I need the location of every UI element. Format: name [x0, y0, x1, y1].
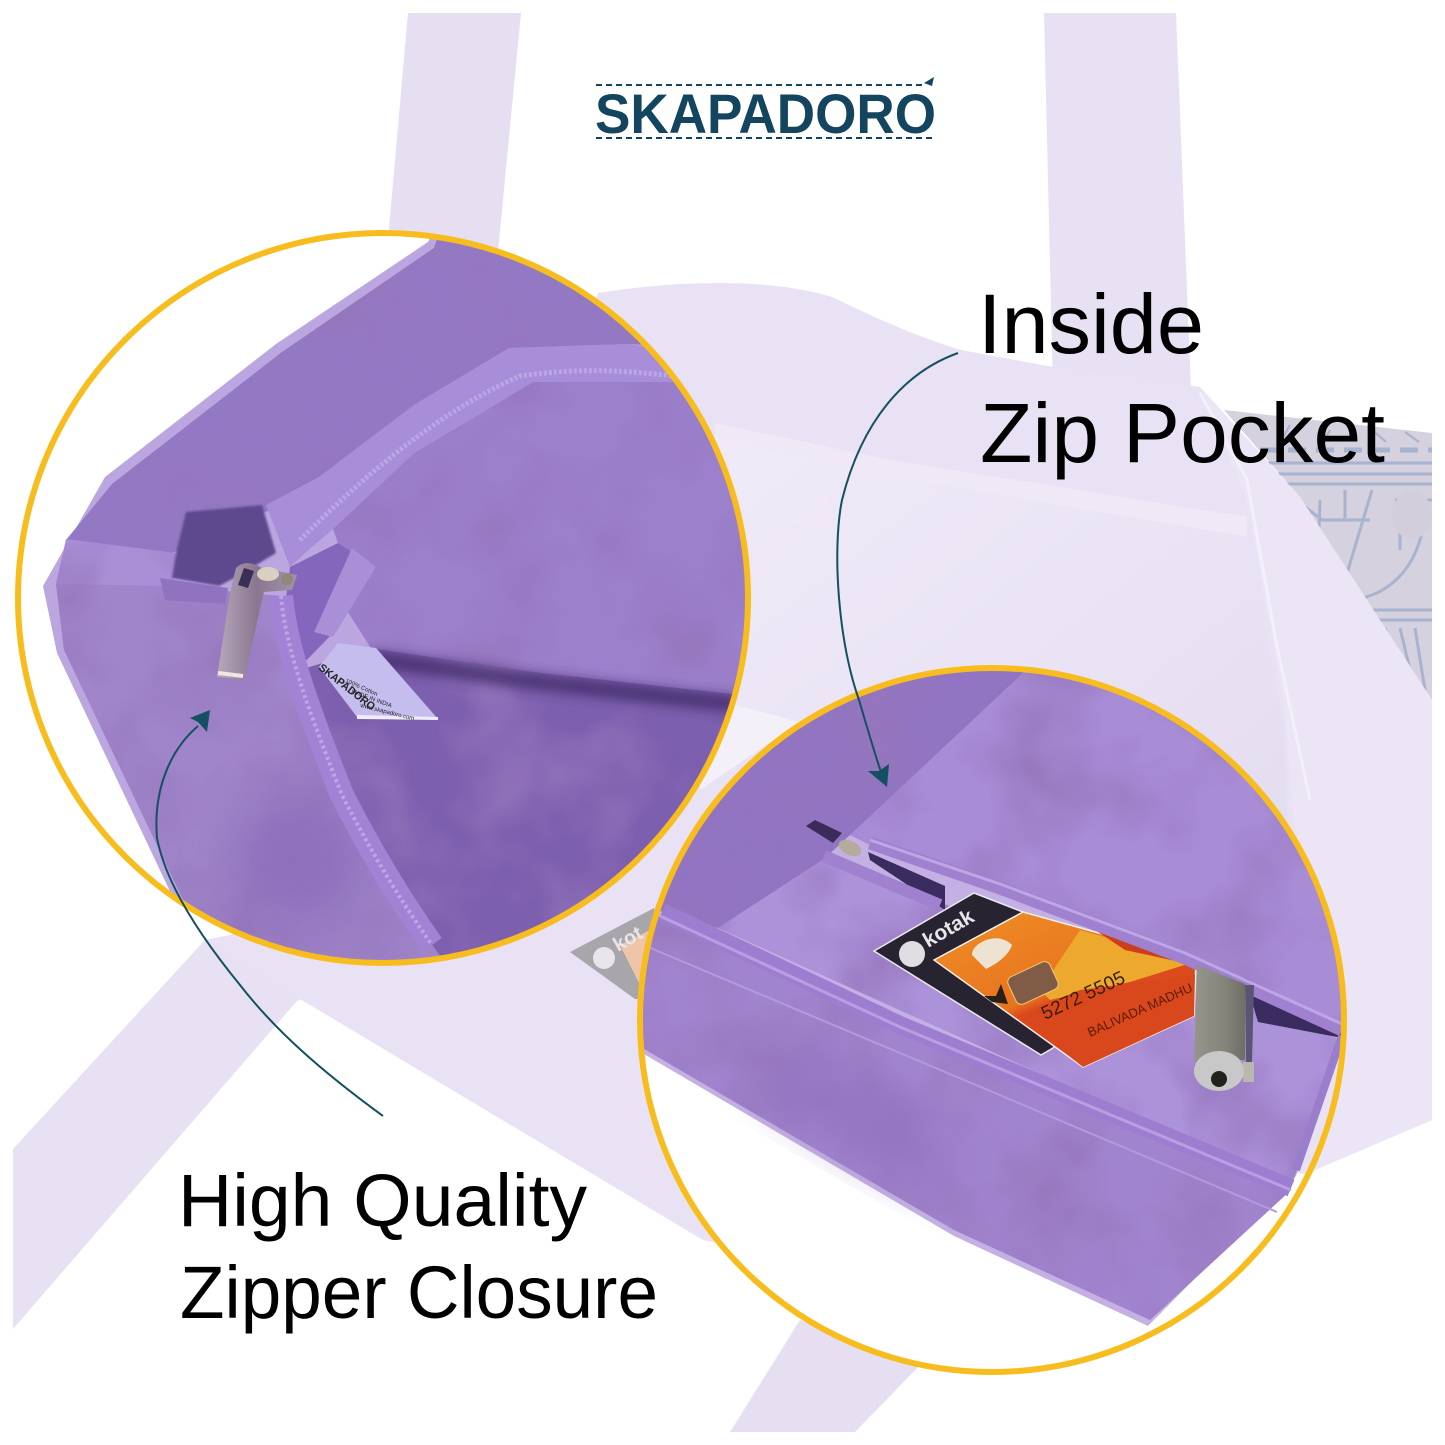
lower panel shading: [764, 1074, 936, 1205]
pale floor strip between the lenses: [700, 705, 800, 790]
care label: www.skapadoro.com: [359, 703, 415, 722]
orange card: BALIVADA MADHU: [1085, 980, 1195, 1040]
zipper pull: [217, 563, 297, 680]
strap: bottom left: [13, 940, 312, 1329]
lavender rim: [43, 239, 732, 956]
top zipper teeth: [300, 371, 690, 540]
care label: SKAPADORO: [316, 662, 377, 713]
orange card: 5272 5505: [1038, 968, 1129, 1025]
lens: inside zip pocket: [620, 640, 1360, 1372]
lower zipper highlight: [660, 916, 1291, 1190]
heading: high quality zipper closure: Zipper Closure: [180, 1251, 658, 1334]
bank logo: [972, 938, 1012, 969]
strap: top left: [386, 13, 521, 262]
pale side of the bag at right: [1297, 1058, 1339, 1174]
orange card: [934, 912, 1196, 1067]
lens ring: [18, 233, 748, 963]
side fold strip: [56, 539, 176, 590]
zip pocket left tape: [824, 856, 940, 905]
black card: [874, 893, 1060, 1055]
flap stitching: [1200, 393, 1310, 800]
bag interior: [700, 440, 1290, 900]
strap: top right: [1044, 13, 1191, 390]
middle panel under zipper: [718, 859, 1342, 1187]
pocket opening right: [1245, 978, 1342, 1038]
arrow: to zipper pull: [156, 710, 383, 1116]
front flap: [56, 584, 447, 990]
dark fold at zipper end: [172, 505, 276, 586]
bag body: [205, 283, 1432, 1330]
lens ring: [640, 668, 1344, 1372]
bag rim: [620, 640, 1345, 1326]
care label: [316, 643, 438, 722]
printed back panel: [1224, 410, 1432, 700]
lower stitch line: [648, 947, 1277, 1212]
upper zip seam: [715, 423, 1247, 537]
inner fabric tab: [285, 543, 376, 667]
logo: top stitched line: [596, 84, 922, 86]
logo: bottom stitched line: [596, 137, 936, 139]
pocket opening: [868, 852, 945, 910]
faded card under the lens: kot: [610, 922, 647, 956]
lower zipper highlight: [281, 596, 432, 945]
upper zipper tape: [870, 843, 1342, 1030]
arrow: to inside zip pocket: [837, 353, 958, 787]
chip: [1006, 960, 1060, 1006]
lens: high quality zipper closure: [15, 230, 751, 966]
heading: inside zip pocket: Zip Pocket: [980, 386, 1385, 480]
pen: [1194, 965, 1254, 1091]
lower zipper tape: [662, 912, 1291, 1188]
flap shadow: [230, 790, 370, 930]
red sunburst: [1097, 932, 1174, 961]
left dark panel: [660, 671, 1024, 928]
red lower field: [1062, 975, 1195, 1067]
zipper highlight: [870, 840, 1342, 1024]
upper panel: [850, 660, 1345, 1030]
faded card under the lens: [570, 908, 670, 1000]
pocket floor: [308, 649, 732, 956]
tab lighter fold: [314, 548, 376, 637]
black card: kotak: [919, 905, 978, 952]
right flap: [1200, 387, 1432, 1172]
care label: 100% Cotton: [344, 678, 378, 698]
logo: [595, 77, 936, 145]
back wall fabric: [66, 240, 642, 552]
small hem at the fold: [160, 578, 228, 604]
logo: wordmark: SKAPADORO: [595, 82, 936, 145]
strap: bottom centre: [730, 1320, 925, 1432]
care label: MADE IN INDIA: [350, 689, 392, 709]
right seam: [1296, 1036, 1342, 1170]
pocket lining: [333, 382, 760, 697]
yellow band: [1040, 930, 1194, 1000]
top zipper band: [266, 344, 680, 567]
floor shadow under the lining: [371, 650, 740, 712]
arrow mark: [984, 984, 1008, 1004]
heading: high quality zipper closure: High Quality: [178, 1159, 587, 1242]
lower zipper: [281, 596, 432, 945]
heading: inside zip pocket: Inside: [978, 277, 1204, 371]
lower panel: [620, 900, 1291, 1320]
credit cards: [874, 893, 1196, 1067]
zipper slider: [806, 820, 864, 859]
logo: needle mark: [924, 77, 934, 86]
